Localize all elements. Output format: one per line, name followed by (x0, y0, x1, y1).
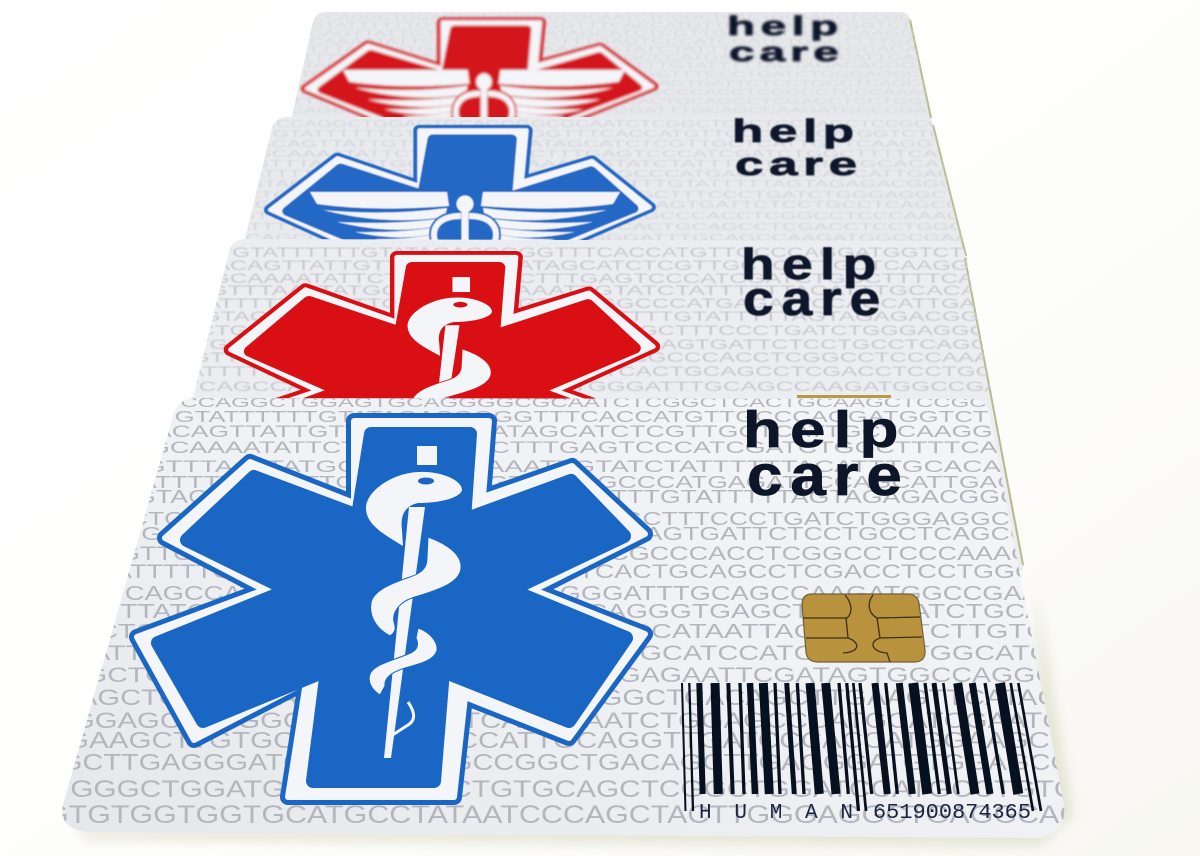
second card wording: care (735, 147, 863, 182)
DNA letter pattern on third card (184, 245, 1017, 394)
DNA letter pattern on back card: GTTTAATTATGGGCCTATAAAATTGTATCTATTTTTTACATTTGCACAT (292, 44, 929, 54)
DNA letter pattern on second card: GTAGGCCTGTCATGCCCGGCTAATTTTTTGTATTTTTAGTAGAGACGGG (247, 178, 956, 190)
front card wording: help (743, 402, 907, 458)
second card wording (732, 114, 863, 182)
DNA letter pattern on third card: CTGGCAAGACTCCTGACCGGAATCTAAGCTTTCCCTGATCTGGGAGGCT (198, 323, 1001, 338)
third card wording: care (743, 271, 888, 325)
back card wording: help (727, 11, 844, 41)
third card wording (741, 239, 888, 325)
DNA letter pattern on third card: TGTATTTTTTGTATAGACGGGGTTTCACCATGTTGCCCAGGATGGTCTC (218, 245, 980, 260)
panel: back card with red winged emblem (292, 12, 932, 120)
DNA letter pattern on third card: GTTGAATGATCTCCTGAACTTGTGATCCGCCCACCTCGGCCTCCCAAAG (191, 350, 1009, 365)
DNA letter pattern on front card (45, 394, 1083, 829)
DNA letter pattern on third card: TCAGCCATGGTTGAAATGGCCACTGGGATTTGCAGCCAAGATGGCCGAA (184, 379, 1017, 394)
DNA letter pattern on front card: TGGGCTGGATGCACCATGCCTGTGCAGCTCGGCTGGATCCATGCCTGTG (52, 776, 1077, 803)
barcode with human label: HUMAN (699, 802, 853, 825)
DNA letter pattern on second card: GTTGAATGATCTCCTGAACTTGTGATCCGCCCACCTCGGCCTCCCAAAG (239, 210, 963, 222)
DNA letter pattern on back card: TCAGCCATGGTTGAAATGGCCACTGGGATTTGCAGCCAAGATGGCCGAA (278, 105, 941, 115)
DNA letter pattern on front card: ATTTTTGTTATTGGAGTCTGGTCTTGGCCCATGAGATTCCAGCATTGAG (139, 472, 1018, 492)
DNA letter pattern on second card: ATTTTTCAAGGGAGTGTAACGGGACTCACTGCAGCCTCGACCTCCTGGG (236, 221, 966, 233)
DNA letter pattern on front card: GAAGCTTGTGCAGATCCCACCATTGCAGGTTGATCCCACCATGGAAGCT (66, 727, 1068, 753)
DNA letter pattern on front card: GTGTGGTGGTGCATGCCTATAATCCCAGCTACTTGGGAGGCTGAGGCAG (45, 801, 1083, 829)
DNA letter pattern on third card: GCAAAATATTCTTTATGATTCTTTGAGTCCCATCGATCTGGCTTTTCAT (211, 271, 987, 286)
DNA letter pattern on third card: ATTTTTCAAGGGAGTGTAACGGGACTCACTGCAGCCTCGACCTCCTGGG (188, 364, 1013, 379)
DNA letter pattern on back card: GCAAAATATTCTTTATGATTCTTTGAGTCCCATCGATCTGGCTTTTCAT (294, 36, 928, 46)
back card wording: care (729, 37, 844, 67)
DNA letter pattern on second card: TCAGCCATGGTTGAAATGGCCACTGGGATTTGCAGCCAAGATGGCCGAA (232, 232, 969, 244)
front card wording (743, 402, 910, 507)
DNA letter pattern on back card: CCCAGGCTGGAGTGCAGGGGCGCAATCTCGGCTCACTGCAAGCTCCGCC (300, 12, 925, 22)
DNA letter pattern on front card: GGAGCCATGGCCATGTAGCTCAGTGAATCTGGAGCCCATGCATCGAATG (72, 708, 1065, 733)
DNA letter pattern on back card: TGTATTTTTTGTATAGACGGGGTTTCACCATGTTGCCCAGGATGGTCTC (298, 20, 926, 30)
DNA letter pattern on front card: TGGAGCCTACCTCCGCCTCCCAGGTTCAAGTGATTCTCCTGCCTCAGCC (125, 523, 1029, 544)
DNA letter pattern on front card: AGCTCAGGTTAATTCCAGCTCTGGAGGGCTCACAGCTTGAAGTTCATAG (78, 685, 1060, 710)
DNA letter pattern on front card: CTGTGACTGTGATCCTTGTTTGTCTGGCCATAATTACTGTGATCTTGTC (97, 620, 1047, 643)
DNA letter pattern on second card: ATTTTTGTTATTGGAGTCTGGTCTTGGCCCATGAGATTCCAGCATTGAG (250, 168, 954, 180)
back card wording (727, 11, 844, 67)
DNA letter pattern on second card: CTGGCAAGACTCCTGACCGGAATCTAAGCTTTCCCTGATCTGGGAGGCT (245, 189, 960, 201)
chip edge peeking out of third card (797, 395, 891, 398)
DNA letter pattern on front card: TCAGCCATGGTTGAAATGGCCACTGGGATTTGCAGCCAAGATGGCCGAA (108, 583, 1041, 605)
DNA letter pattern on back card: GTAGGCCTGTCATGCCCGGCTAATTTTTTGTATTTTTAGTAGAGACGGG (288, 60, 931, 70)
DNA letter pattern on back card: ATTTTTGTTATTGGAGTCTGGTCTTGGCCCATGAGATTCCAGCATTGAG (290, 52, 930, 62)
DNA letter pattern on front card: CTGGCAAGACTCCTGACCGGAATCTAAGCTTTCCCTGATCTGGGAGGCT (129, 509, 1026, 529)
DNA letter pattern on front card: CCCAGGCTGGAGTGCAGGGGCGCAATCTCGGCTCACTGCAAGCTCCGCC (163, 394, 1004, 410)
DNA letter pattern on back card: ACAGTTATTGTTTATTTTTCATAGCATCTCGTTGCTCATTGCTCAAGGT (296, 28, 927, 38)
DNA letter pattern on back card (278, 12, 941, 115)
red star of life emblem, third card (224, 251, 660, 399)
front card wording: care (747, 443, 910, 507)
DNA letter pattern on front card: GTAGGCCTGTCATGCCCGGCTAATTTTTTGTATTTTTAGTAGAGACGGG (135, 487, 1021, 507)
blue winged star emblem, second card (263, 124, 657, 240)
third card wording: help (741, 239, 884, 289)
DNA letter pattern on back card: TGGAGCCTACCTCCGCCTCCCAGGTTCAAGTGATTCTCCTGCCTCAGCC (284, 78, 934, 88)
DNA letter pattern on second card: TGGAGCCTACCTCCGCCTCCCAGGTTCAAGTGATTCTCCTGCCTCAGCC (242, 199, 962, 211)
DNA letter pattern on front card: TTTATCTCAGAATTAGTGGCTGTTTCCAGGGTGAGCTGGCTCATCTGCA (103, 601, 1045, 623)
DNA letter pattern on third card: ACAGTTATTGTTTATTTTTCATAGCATCTCGTTGCTCATTGCTCAAGGT (214, 258, 984, 273)
DNA letter pattern on front card: GCTTGAGGGATGCAGTGGAGCCGGCTGACAGCTTGAGGGATGTGGAGCG (60, 749, 1073, 775)
barcode with human label: 651900874365 (873, 802, 1031, 825)
barcode with human label (682, 683, 1041, 825)
red winged star emblem, back card (299, 15, 660, 117)
DNA letter pattern on front card: TGTATTTTTTGTATAGACGGGGTTTCACCATGTTGCCCAGGATGGTCTC (159, 409, 1007, 426)
panel: third card with red star of life (150, 239, 1024, 572)
DNA letter pattern on second card: CCCAGGCTGGAGTGCAGGGGCGCAATCTCGGCTCACTGCAAGCTCCGCC (262, 118, 943, 130)
DNA letter pattern on second card (232, 118, 969, 244)
DNA letter pattern on second card: GTTTAATTATGGGCCTATAAAATTGTATCTATTTTTTACATTTGCACAT (252, 158, 952, 170)
DNA letter pattern on front card: ATTTTTCAAGGGAGTGTAACGGGACTCACTGCAGCCTCGACCTCCTGGG (114, 561, 1036, 583)
DNA letter pattern on second card: TGTATTTTTTGTATAGACGGGGTTTCACCATGTTGCCCAGGATGGTCTC (260, 128, 945, 140)
DNA letter pattern on third card: GTTTAATTATGGGCCTATAAAATTGTATCTATTTTTTACATTTGCACAT (208, 283, 991, 298)
DNA letter pattern on third card: ATTTTTGTTATTGGAGTCTGGTCTTGGCCCATGAGATTCCAGCATTGAG (205, 296, 994, 311)
shadow beneath the cards (70, 590, 1074, 846)
DNA letter pattern on front card: GCTGATAGTGCCCAGGCGAAGGCTATTGAGAATTCGATAGTGGCCAGGC (85, 663, 1056, 687)
icon: gold smart card chip (802, 594, 925, 662)
DNA letter pattern on back card: CTGGCAAGACTCCTGACCGGAATCTAAGCTTTCCCTGATCTGGGAGGCT (286, 69, 932, 79)
DNA letter pattern on second card: ACAGTTATTGTTTATTTTTCATAGCATCTCGTTGCTCATTGCTCAAGGT (257, 138, 947, 150)
DNA letter pattern on third card: GTAGGCCTGTCATGCCCGGCTAATTTTTTGTATTTTTAGTAGAGACGGG (202, 309, 998, 324)
panel: second card with blue winged emblem (245, 117, 968, 260)
blue star of life emblem, front card (137, 421, 645, 797)
DNA letter pattern on back card: GTTGAATGATCTCCTGAACTTGTGATCCGCCCACCTCGGCCTCCCAAAG (282, 87, 936, 97)
second card wording: help (732, 114, 860, 149)
DNA letter pattern on front card: GTTTAATTATGGGCCTATAAAATTGTATCTATTTTTTACATTTGCACAT (144, 457, 1016, 476)
DNA letter pattern on front card: ACAGTTATTGTTTATTTTTCATAGCATCTCGTTGCTCATTGCTCAAGGT (154, 423, 1009, 441)
DNA letter pattern on front card: GTTGAATGATCTCCTGAACTTGTGATCCGCCCACCTCGGCCTCCCAAAG (119, 544, 1032, 565)
DNA letter pattern on front card: ATTGTTGCTTGTCTGGCATGAGCAGCTTGCATCCATGTTGCTTGGCATG (91, 642, 1052, 665)
DNA letter pattern on third card: TGGAGCCTACCTCCGCCTCCCAGGTTCAAGTGATTCTCCTGCCTCAGCC (195, 337, 1005, 352)
DNA letter pattern on second card: GCAAAATATTCTTTATGATTCTTTGAGTCCCATCGATCTGGCTTTTCAT (255, 148, 950, 160)
DNA letter pattern on back card: ATTTTTCAAGGGAGTGTAACGGGACTCACTGCAGCCTCGACCTCCTGGG (280, 96, 938, 106)
panel: front card with blue star of life (45, 394, 1083, 838)
DNA letter pattern on front card: GCAAAATATTCTTTATGATTCTTTGAGTCCCATCGATCTGGCTTTTCAT (149, 438, 1012, 457)
